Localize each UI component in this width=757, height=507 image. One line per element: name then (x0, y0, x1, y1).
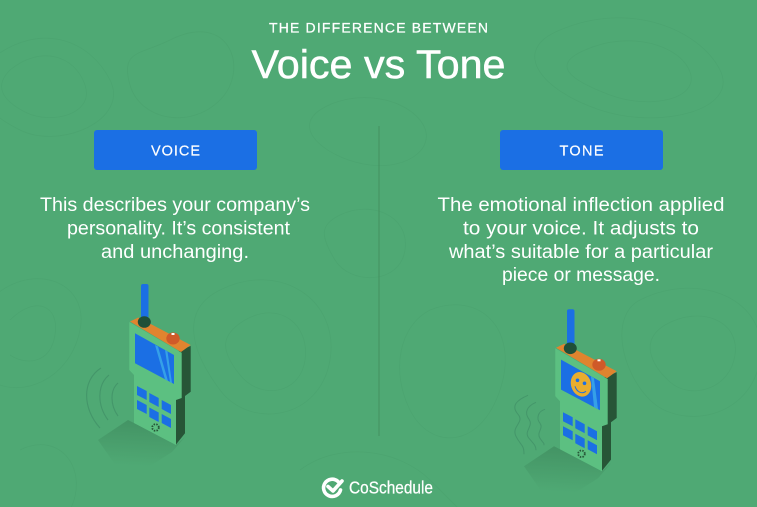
tone button: TONE (560, 144, 604, 160)
logo: CoSchedule (324, 478, 433, 498)
tone description: to your voice. It adjusts to (463, 218, 699, 240)
voice description: personality. It’s consistent (67, 218, 291, 240)
voice description: and unchanging. (101, 242, 249, 263)
icon: voice walkie-talkie (87, 284, 191, 466)
icon: tone walkie-talkie (515, 309, 617, 492)
voice button: VOICE (151, 144, 200, 160)
panel: tone (438, 130, 724, 286)
eyebrow heading: THE DIFFERENCE BETWEEN (269, 20, 488, 36)
voice button (94, 130, 257, 170)
tone description: piece or message. (502, 265, 660, 286)
logo: CoSchedule: CoSchedule (349, 478, 433, 498)
icon: check mark (324, 479, 342, 496)
panel: voice (40, 130, 310, 263)
tone description: The emotional inflection applied (438, 195, 724, 216)
title: Voice vs Tone (252, 43, 506, 87)
voice description: This describes your company’s (40, 195, 310, 216)
tone description: what’s suitable for a particular (448, 242, 714, 263)
tone button (500, 130, 663, 170)
